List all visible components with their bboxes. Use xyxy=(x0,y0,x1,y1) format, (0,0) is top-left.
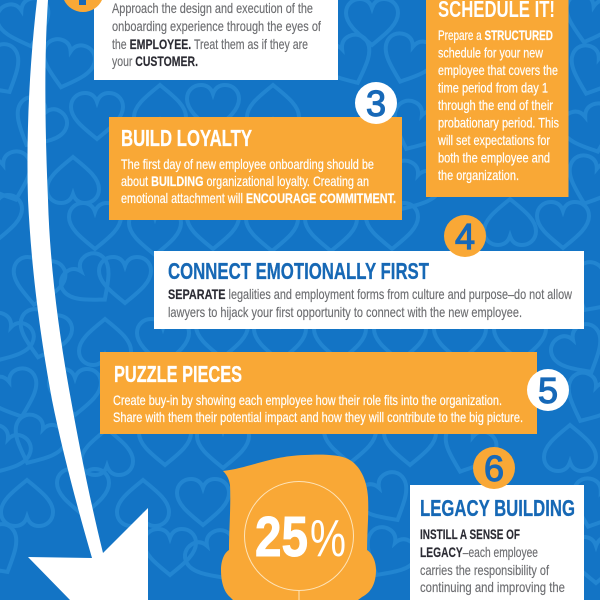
panel: legacy building xyxy=(410,485,584,600)
stat: 25 percent: % xyxy=(310,510,346,568)
icon: number 3 badge xyxy=(355,82,397,124)
text block: build loyalty body: emotional attachment will ENCOURAGE COMMITMENT. xyxy=(121,190,396,206)
text block: schedule body: through the end of their xyxy=(438,97,553,113)
text block: build loyalty body: about BUILDING organizational loyalty. Creating an xyxy=(121,173,369,189)
panel: connect emotionally first xyxy=(154,251,584,329)
text block: schedule body: the organization. xyxy=(438,167,519,183)
icon: number 5 badge xyxy=(527,369,569,411)
text block: puzzle body xyxy=(113,392,523,425)
text block: approach xyxy=(112,0,321,69)
text block: approach: onboarding experience through the eyes of xyxy=(112,18,321,34)
heading: build loyalty: BUILD LOYALTY xyxy=(121,125,252,151)
panel: build loyalty xyxy=(109,117,402,220)
heading: connect emotionally first: CONNECT EMOTIONALLY FIRST xyxy=(168,258,429,284)
text block: legacy body: INSTILL A SENSE OF xyxy=(420,526,520,542)
text block: approach: Approach the design and execution of the xyxy=(112,0,313,16)
text block: legacy body: carries the responsibility of xyxy=(420,562,549,578)
icon: number 4 badge: 4 xyxy=(455,216,475,257)
panel: customer experience xyxy=(94,0,338,80)
panel: schedule it xyxy=(426,0,568,197)
icon: number 4 badge xyxy=(444,215,486,257)
text block: schedule body xyxy=(437,27,559,183)
text block: schedule body: schedule for your new xyxy=(438,44,544,60)
text block: puzzle body: Create buy-in by showing each employee how their role fits into the organization. xyxy=(113,392,502,408)
text block: schedule body: time period from day 1 xyxy=(438,80,548,96)
text block: legacy body: LEGACY–each employee xyxy=(420,544,538,560)
icon: number 5 badge: 5 xyxy=(538,370,558,411)
text block: schedule body: both the employee and xyxy=(438,150,550,166)
text block: approach: your CUSTOMER. xyxy=(112,53,198,69)
icon: person head with statistic xyxy=(221,455,376,600)
text block: connect body xyxy=(168,286,573,320)
text block: legacy body xyxy=(420,526,565,595)
text block: schedule body: will set expectations for xyxy=(437,132,550,148)
text block: schedule body: Prepare a STRUCTURED xyxy=(438,27,553,43)
text block: build loyalty body xyxy=(121,156,396,206)
icon: number 6 badge: 6 xyxy=(484,448,504,489)
stat: 25 percent xyxy=(255,505,346,569)
panel: puzzle pieces xyxy=(100,352,537,434)
heading: puzzle pieces: PUZZLE PIECES xyxy=(114,361,242,387)
arrow: curved white arrow xyxy=(27,0,148,600)
icon: number 3 badge: 3 xyxy=(366,83,386,124)
text block: build loyalty body: The first day of new employee onboarding should be xyxy=(121,156,374,172)
text block: approach: the EMPLOYEE. Treat them as if they are xyxy=(112,36,308,52)
icon: number 1 badge xyxy=(64,0,102,12)
text block: schedule body: probationary period. This xyxy=(438,115,559,131)
text block: schedule body: employee that covers the xyxy=(438,62,558,78)
text block: legacy body: continuing and improving the xyxy=(420,579,565,595)
icon: number 6 badge xyxy=(473,447,515,489)
stat: 25 percent: 25 xyxy=(255,505,308,569)
